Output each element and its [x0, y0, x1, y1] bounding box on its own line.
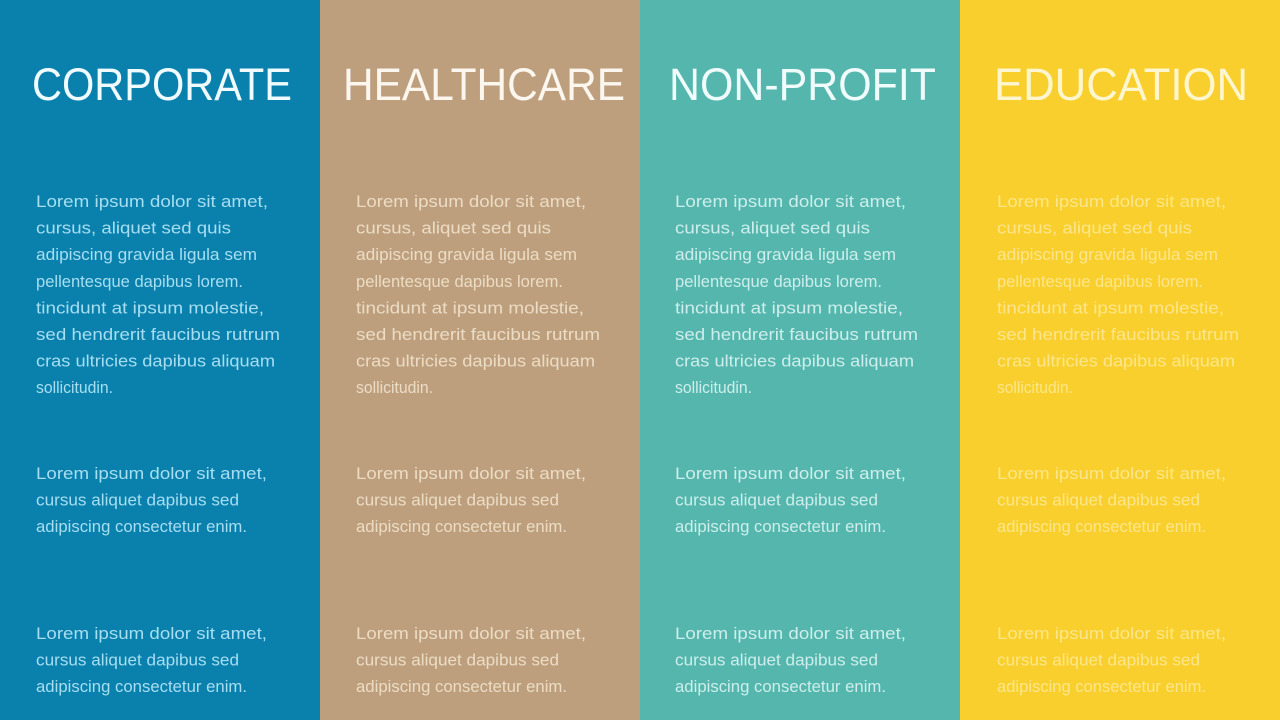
panel: corporate — [0, 0, 320, 720]
text block: corporate first: sollicitudin. — [36, 378, 113, 397]
panel: non-profit — [640, 0, 960, 720]
text block: healthcare second: cursus aliquet dapibus sed — [356, 491, 559, 510]
text block: education first: sed hendrerit faucibus rutrum — [997, 325, 1239, 344]
text block: corporate first: adipiscing gravida ligula sem — [36, 245, 257, 264]
text block: non-profit third — [675, 624, 906, 696]
heading: non-profit: NON-PROFIT — [669, 59, 936, 110]
text block: healthcare first — [356, 192, 600, 397]
text block: non-profit first: pellentesque dapibus lorem. — [675, 272, 882, 291]
text block: corporate first: Lorem ipsum dolor sit amet, — [36, 192, 268, 211]
text block: education second: adipiscing consectetur enim. — [997, 517, 1206, 536]
text block: non-profit first: cursus, aliquet sed quis — [675, 219, 870, 238]
text block: education third: Lorem ipsum dolor sit amet, — [997, 624, 1226, 643]
text block: non-profit third: adipiscing consectetur enim. — [675, 677, 886, 696]
text block: healthcare third: adipiscing consectetur enim. — [356, 677, 567, 696]
text block: corporate second — [36, 464, 267, 536]
text block: corporate second: adipiscing consectetur enim. — [36, 517, 247, 536]
text block: non-profit first — [675, 192, 918, 397]
text block: non-profit second: adipiscing consectetur enim. — [675, 517, 886, 536]
text block: education third: cursus aliquet dapibus sed — [997, 651, 1200, 670]
text block: healthcare second: Lorem ipsum dolor sit amet, — [356, 464, 586, 483]
heading: healthcare: HEALTHCARE — [343, 59, 625, 110]
text block: healthcare second: adipiscing consectetur enim. — [356, 517, 567, 536]
text block: education second: cursus aliquet dapibus sed — [997, 491, 1200, 510]
text block: corporate second: cursus aliquet dapibus sed — [36, 491, 239, 510]
text block: education first: cursus, aliquet sed quis — [997, 219, 1192, 238]
panel: education — [960, 0, 1280, 720]
text block: education first: pellentesque dapibus lorem. — [997, 272, 1203, 291]
text block: healthcare third: Lorem ipsum dolor sit amet, — [356, 624, 586, 643]
text block: education first: Lorem ipsum dolor sit amet, — [997, 192, 1226, 211]
text block: healthcare first: pellentesque dapibus lorem. — [356, 272, 563, 291]
text block: healthcare first: tincidunt at ipsum molestie, — [356, 298, 584, 317]
text block: non-profit second: cursus aliquet dapibus sed — [675, 491, 878, 510]
text block: education third — [997, 624, 1226, 696]
text block: healthcare first: cursus, aliquet sed quis — [356, 219, 551, 238]
text block: education first: adipiscing gravida ligula sem — [997, 245, 1218, 264]
text block: non-profit first: sollicitudin. — [675, 378, 752, 397]
text block: education third: adipiscing consectetur enim. — [997, 677, 1206, 696]
text block: corporate first: pellentesque dapibus lorem. — [36, 272, 243, 291]
text block: education second — [997, 464, 1226, 536]
text block: corporate third — [36, 624, 267, 696]
text block: education first: cras ultricies dapibus aliquam — [997, 352, 1235, 371]
text block: healthcare first: sed hendrerit faucibus rutrum — [356, 325, 600, 344]
text block: education first: tincidunt at ipsum molestie, — [997, 298, 1224, 317]
text block: non-profit second — [675, 464, 906, 536]
text block: non-profit second: Lorem ipsum dolor sit amet, — [675, 464, 906, 483]
text block: corporate third: adipiscing consectetur enim. — [36, 677, 247, 696]
text block: corporate first — [36, 192, 280, 397]
text block: non-profit first: Lorem ipsum dolor sit amet, — [675, 192, 906, 211]
text block: corporate third: Lorem ipsum dolor sit amet, — [36, 624, 267, 643]
text block: corporate first: cras ultricies dapibus aliquam — [36, 352, 275, 371]
panel: healthcare — [320, 0, 640, 720]
text block: healthcare third — [356, 624, 586, 696]
text block: education first: sollicitudin. — [997, 378, 1073, 397]
text block: corporate first: sed hendrerit faucibus rutrum — [36, 325, 280, 344]
text block: healthcare first: sollicitudin. — [356, 378, 433, 397]
text block: healthcare second — [356, 464, 586, 536]
text block: healthcare first: adipiscing gravida ligula sem — [356, 245, 577, 264]
text block: corporate first: tincidunt at ipsum molestie, — [36, 298, 264, 317]
text block: healthcare first: cras ultricies dapibus aliquam — [356, 352, 595, 371]
text block: non-profit third: cursus aliquet dapibus sed — [675, 651, 878, 670]
text block: non-profit first: adipiscing gravida ligula sem — [675, 245, 896, 264]
text block: non-profit first: cras ultricies dapibus aliquam — [675, 352, 914, 371]
text block: education first — [997, 192, 1239, 397]
text block: non-profit first: sed hendrerit faucibus rutrum — [675, 325, 918, 344]
heading: education: EDUCATION — [994, 59, 1248, 110]
text block: corporate first: cursus, aliquet sed quis — [36, 219, 231, 238]
text block: healthcare third: cursus aliquet dapibus sed — [356, 651, 559, 670]
text block: non-profit first: tincidunt at ipsum molestie, — [675, 298, 903, 317]
text block: corporate third: cursus aliquet dapibus sed — [36, 651, 239, 670]
heading: corporate: CORPORATE — [32, 59, 292, 110]
text block: non-profit third: Lorem ipsum dolor sit amet, — [675, 624, 906, 643]
text block: education second: Lorem ipsum dolor sit amet, — [997, 464, 1226, 483]
text block: healthcare first: Lorem ipsum dolor sit amet, — [356, 192, 586, 211]
text block: corporate second: Lorem ipsum dolor sit amet, — [36, 464, 267, 483]
